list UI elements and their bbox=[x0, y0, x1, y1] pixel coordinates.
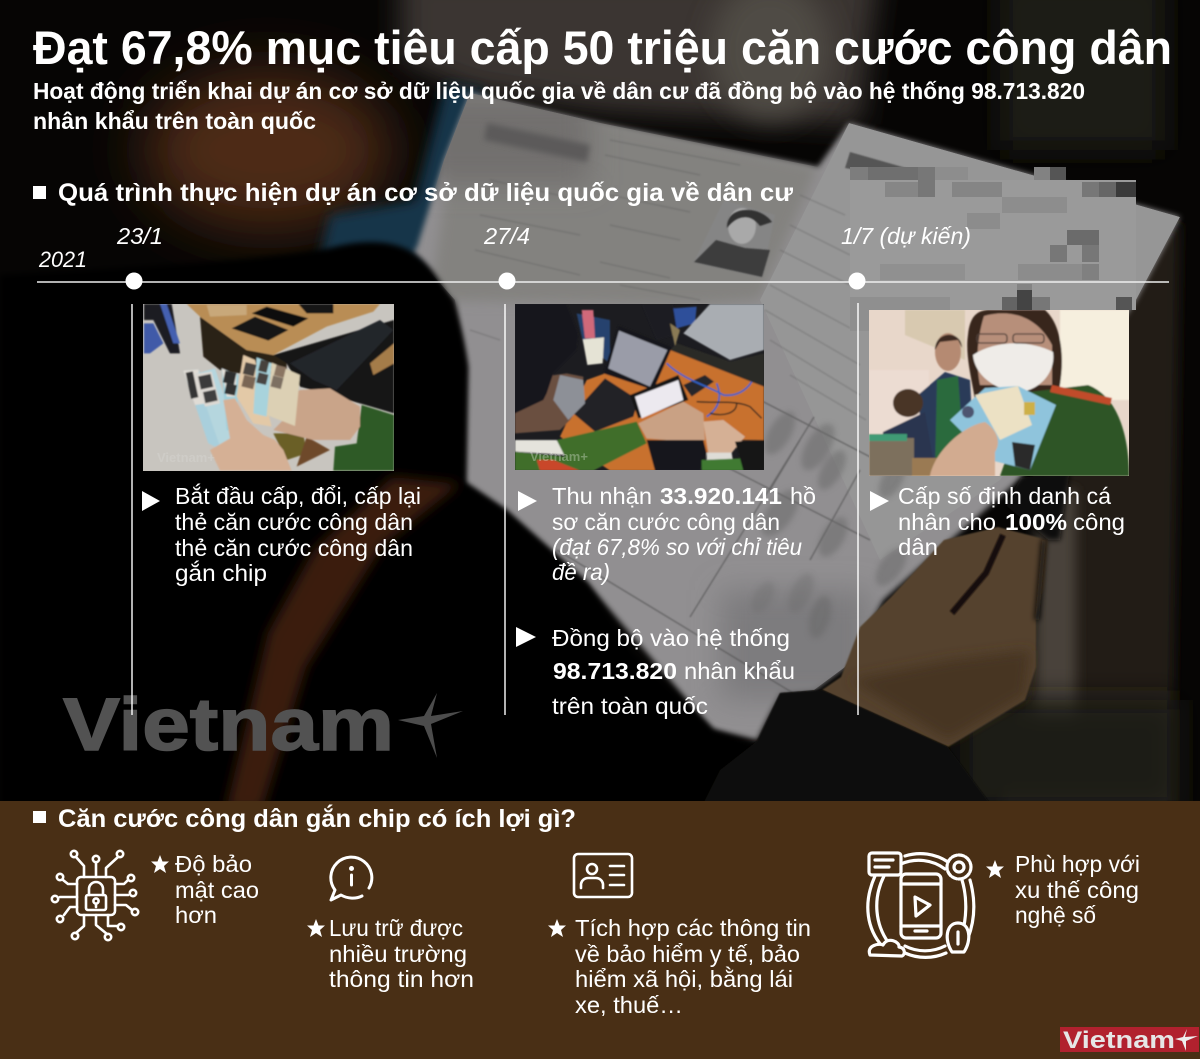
icon: info bubble bbox=[331, 857, 372, 900]
text: 27/4: hồ bbox=[790, 483, 816, 509]
text: benefit 4: nghệ số bbox=[1015, 902, 1096, 928]
document text lines bbox=[470, 140, 866, 420]
text: benefit 1: mật cao bbox=[175, 877, 259, 903]
text: 23/1: gắn chip bbox=[175, 560, 267, 586]
subtitle: Hoạt động triển khai dự án cơ sở dữ liệu quốc gia về dân cư đã đồng bộ vào hệ thống 98.713.820 bbox=[33, 78, 1085, 104]
title: Đạt 67,8% mục tiêu cấp 50 triệu căn cước công dân bbox=[33, 21, 1172, 74]
text: benefit 4 bbox=[986, 851, 1140, 928]
text: 1/7: 100% bbox=[1005, 509, 1067, 535]
black wedge behind hand bbox=[1005, 470, 1070, 540]
text: benefit 4: Phù hợp với bbox=[1015, 851, 1140, 877]
text: 27/4: 33.920.141 bbox=[660, 483, 782, 509]
logo: Vietnam+ bbox=[1060, 1027, 1199, 1054]
text: benefit 3: xe, thuế… bbox=[575, 992, 683, 1018]
subtitle: nhân khẩu trên toàn quốc bbox=[33, 108, 316, 134]
cards bbox=[950, 386, 1056, 470]
panel: benefits bbox=[0, 801, 1200, 1059]
text: 27/4: nhân khẩu bbox=[684, 658, 795, 684]
text: benefit 1: Độ bảo bbox=[175, 851, 252, 877]
text: 23/1: Bắt đầu cấp, đổi, cấp lại bbox=[175, 483, 421, 509]
subtitle bbox=[33, 78, 1085, 134]
woman bbox=[967, 310, 1062, 405]
section heading: timeline: Quá trình thực hiện dự án cơ sở dữ liệu quốc gia về dân cư bbox=[58, 179, 794, 207]
text: benefit 3: về bảo hiểm y tế, bảo bbox=[575, 941, 800, 967]
text: 27/4: (đạt 67,8% so với chỉ tiêu bbox=[552, 534, 802, 560]
text: benefit 2: thông tin hơn bbox=[329, 966, 474, 992]
photo: officer showing id cards bbox=[869, 310, 1130, 476]
papers bbox=[413, 93, 1180, 740]
text: benefit 3 bbox=[548, 915, 811, 1018]
timeline: 1/7 (dự kiến) bbox=[841, 223, 971, 249]
photo: officer scanning fingerprints: Vietnam+ bbox=[530, 449, 588, 464]
text: 27/4: sơ căn cước công dân bbox=[552, 509, 780, 535]
watermark: Vietnam+: Vietnam bbox=[63, 683, 394, 766]
timeline: 2021 bbox=[38, 247, 87, 272]
icon: security chip bbox=[52, 851, 138, 940]
timeline bbox=[37, 223, 1169, 715]
text: 27/4: Thu nhận bbox=[552, 483, 652, 509]
text: 27/4 bbox=[516, 483, 816, 719]
text: 1/7: nhân cho bbox=[898, 509, 996, 535]
form table lines bbox=[557, 400, 880, 693]
pixelated privacy block bbox=[850, 167, 1136, 331]
fingerprints bbox=[758, 411, 907, 636]
text: 1/7: dân bbox=[898, 534, 938, 560]
photo: hands holding id cards bbox=[143, 304, 394, 471]
sleeve bbox=[700, 690, 995, 810]
text: benefit 3: hiểm xã hội, bằng lái bbox=[575, 966, 793, 992]
text: 27/4: 98.713.820 bbox=[553, 658, 677, 684]
text: 23/1: thẻ căn cước công dân bbox=[175, 535, 413, 561]
text: benefit 1 bbox=[151, 851, 259, 928]
photo: officer scanning fingerprints bbox=[515, 304, 764, 471]
background people bbox=[935, 333, 961, 371]
icon: id card bbox=[574, 854, 632, 897]
icon: digital technology bbox=[868, 853, 974, 957]
text: 27/4: Đồng bộ vào hệ thống bbox=[552, 625, 790, 651]
text: benefit 2: Lưu trữ được bbox=[329, 915, 463, 941]
hand bbox=[822, 527, 1048, 747]
text: benefit 3: Tích hợp các thông tin bbox=[575, 915, 811, 941]
background photo bbox=[117, 0, 1184, 801]
person silhouette bbox=[0, 242, 760, 810]
text: 1/7: Cấp số định danh cá bbox=[898, 483, 1111, 509]
text: 1/7 bbox=[870, 483, 1125, 560]
text: 23/1 bbox=[142, 483, 421, 586]
timeline: 27/4 bbox=[483, 223, 530, 249]
text: 27/4: đề ra) bbox=[552, 559, 610, 585]
hand bbox=[930, 422, 998, 476]
coat strap bbox=[226, 477, 460, 810]
text: 27/4: trên toàn quốc bbox=[552, 693, 708, 719]
text: benefit 2 bbox=[307, 915, 474, 992]
photo watermark: Vietnam+ bbox=[157, 450, 215, 465]
timeline: 23/1 bbox=[116, 223, 163, 249]
logo: Vietnam+: Vietnam bbox=[1063, 1027, 1175, 1054]
blurred environment bbox=[143, 70, 393, 230]
text: 23/1: thẻ căn cước công dân bbox=[175, 509, 413, 535]
uniform bbox=[1000, 385, 1129, 476]
portrait on paper bbox=[694, 200, 775, 277]
text: benefit 1: hơn bbox=[175, 902, 217, 928]
text: benefit 2: nhiều trường bbox=[329, 941, 467, 967]
text: 1/7: công bbox=[1073, 509, 1125, 535]
section heading: benefits: Căn cước công dân gắn chip có ích lợi gì? bbox=[58, 803, 576, 833]
text: benefit 4: xu thế công bbox=[1015, 877, 1139, 903]
barcodes bbox=[484, 123, 590, 162]
